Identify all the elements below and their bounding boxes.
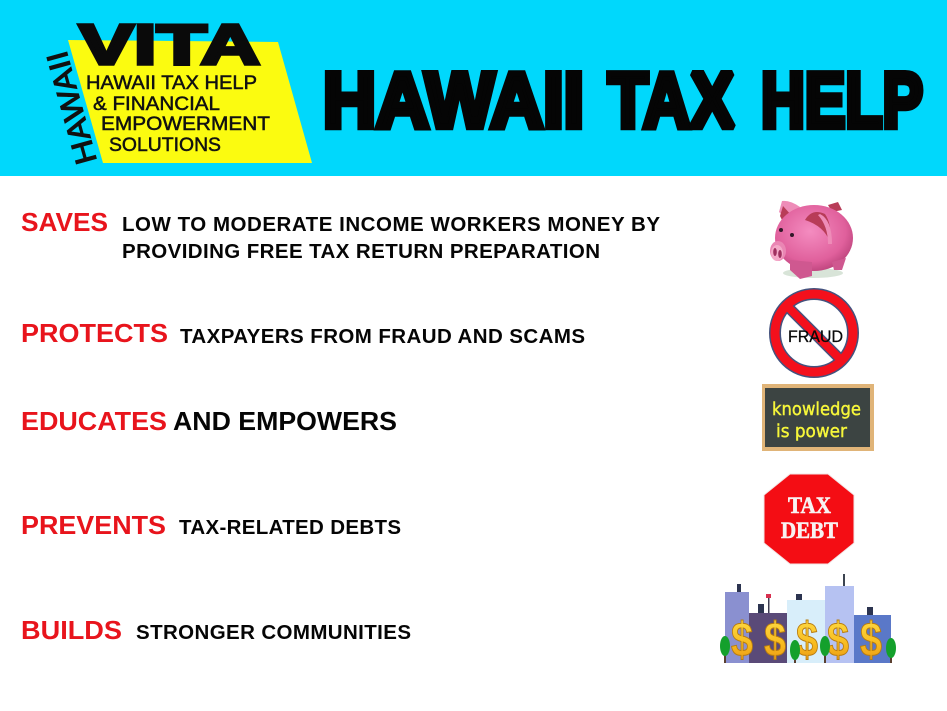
icon: city buildings with dollar signs: $ — [827, 614, 849, 667]
row: saves: PROVIDING FREE TAX RETURN PREPARATION — [122, 240, 600, 263]
row: educates — [21, 406, 397, 436]
logo: VITA Hawaii: EMPOWERMENT — [101, 114, 270, 135]
icon: city buildings with dollar signs: $ — [860, 614, 882, 667]
logo: VITA Hawaii: HAWAII — [41, 47, 104, 168]
icon: no fraud sign — [775, 294, 853, 372]
icon: no fraud sign: FRAUD — [788, 327, 843, 346]
row: protects: PROTECTS — [21, 318, 168, 348]
row: educates: EDUCATES — [21, 406, 167, 436]
logo: VITA Hawaii: HAWAII TAX HELP — [86, 73, 257, 94]
icon: tax debt stop sign: DEBT — [781, 518, 838, 543]
icon: city buildings with dollar signs: $ — [796, 614, 818, 667]
title: HAWAII — [323, 56, 584, 144]
logo: VITA Hawaii: & FINANCIAL — [93, 94, 220, 115]
row: prevents: TAX-RELATED DEBTS — [179, 516, 401, 539]
icon: tax debt stop sign — [764, 474, 854, 564]
row: builds: BUILDS — [21, 615, 122, 645]
row: educates: AND EMPOWERS — [173, 406, 397, 436]
row: prevents — [21, 510, 401, 540]
icon: city buildings with dollar signs — [720, 574, 896, 667]
icon: knowledge is power chalkboard — [762, 384, 874, 451]
logo: VITA Hawaii: VITA — [79, 13, 260, 77]
row: prevents: PREVENTS — [21, 510, 166, 540]
icon: city buildings with dollar signs: $ — [731, 614, 753, 667]
header banner — [0, 0, 947, 176]
row: builds — [21, 615, 411, 645]
title — [323, 56, 923, 144]
icon: knowledge is power chalkboard: knowledge — [772, 400, 861, 420]
title: TAX — [608, 56, 734, 144]
row: saves: SAVES — [21, 207, 108, 237]
logo: VITA Hawaii — [41, 13, 312, 168]
icon: city buildings with dollar signs: $ — [764, 614, 786, 667]
row: saves — [21, 207, 660, 263]
row: protects: TAXPAYERS FROM FRAUD AND SCAMS — [180, 325, 585, 348]
logo: VITA Hawaii: SOLUTIONS — [109, 135, 221, 156]
row: protects — [21, 318, 585, 348]
icon: piggy bank — [770, 201, 853, 279]
icon: tax debt stop sign: TAX — [788, 493, 831, 518]
icon: knowledge is power chalkboard: is power — [776, 422, 848, 442]
row: saves: LOW TO MODERATE INCOME WORKERS MONEY BY — [122, 213, 660, 236]
row: builds: STRONGER COMMUNITIES — [136, 621, 411, 644]
